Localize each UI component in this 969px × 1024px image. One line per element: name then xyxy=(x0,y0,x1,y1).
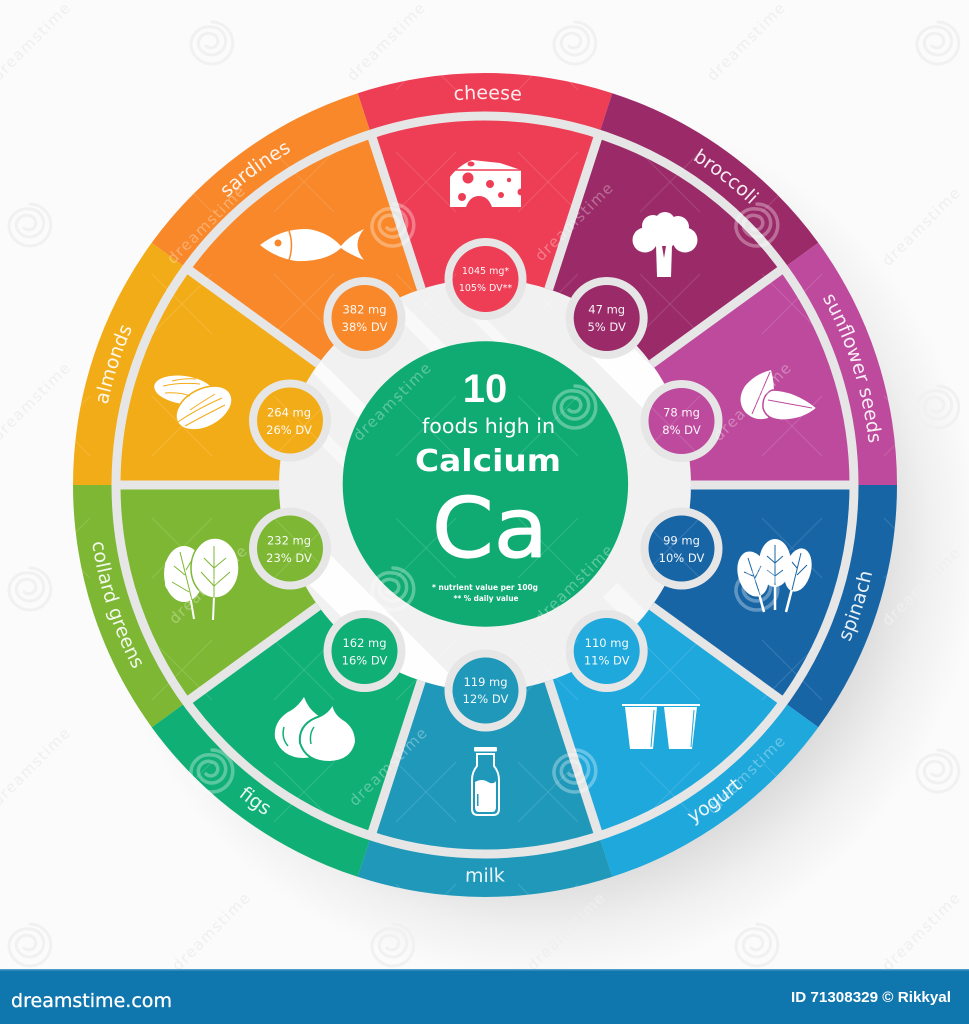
label: figs: figs xyxy=(240,786,270,814)
label: sunflower seeds: sunflower seeds xyxy=(823,294,882,442)
value bubble: collard greens: 23% DV xyxy=(266,551,312,565)
central hub background with streaks xyxy=(279,283,691,687)
icon: collard greens xyxy=(164,538,239,620)
label: broccoli: broccoli xyxy=(694,148,760,204)
value bubble: sunflower seeds xyxy=(640,380,722,462)
background watermark: dreamstime xyxy=(343,0,430,85)
value bubble: yogurt xyxy=(566,610,648,692)
icon: spinach xyxy=(733,539,816,612)
value bubble: milk: 12% DV xyxy=(463,692,508,706)
icon: figs xyxy=(275,697,356,762)
panel: sunflower seeds xyxy=(640,242,897,485)
value bubble: sardines: 38% DV xyxy=(342,320,387,334)
panel: figs xyxy=(152,606,422,877)
value bubble: collard greens: 232 mg xyxy=(267,534,311,548)
icon: fish xyxy=(260,229,364,261)
heading: foods high in: foods high in xyxy=(422,414,555,438)
ring and dividers xyxy=(116,116,854,854)
value bubble: almonds: 26% DV xyxy=(266,423,312,437)
value bubble: broccoli xyxy=(566,277,648,359)
label: sardines: sardines xyxy=(222,143,290,197)
panel: center circle xyxy=(343,341,628,627)
background watermark: dreamstime xyxy=(878,543,965,630)
value bubble: figs: 16% DV xyxy=(342,654,387,668)
overlay watermark: dreamstime xyxy=(531,540,618,627)
value bubble: spinach: 10% DV xyxy=(659,551,704,565)
icon: milk bottle xyxy=(472,747,499,815)
background watermark: dreamstime xyxy=(168,888,255,975)
footnotes xyxy=(432,583,538,603)
icon: yogurt cups xyxy=(622,704,700,749)
panel: almonds xyxy=(73,242,331,485)
value bubble: cheese xyxy=(444,238,526,320)
value bubble: yogurt: 110 mg xyxy=(585,636,629,650)
label: milk: milk xyxy=(466,867,505,882)
icon: sunflower seeds xyxy=(740,370,817,420)
footer brand: dreamstime.com xyxy=(11,990,172,1012)
panel: spinach xyxy=(640,485,897,728)
heading: Ca symbol: Ca xyxy=(432,480,548,577)
heading: 10: 10 xyxy=(463,367,507,411)
panel: collard greens xyxy=(73,485,331,728)
background watermark: dreamstime xyxy=(878,183,965,270)
footnotes: * nutrient value per 100g xyxy=(432,583,538,592)
value bubble: almonds xyxy=(249,380,331,462)
label: spinach: spinach xyxy=(841,572,872,641)
icon: almonds xyxy=(152,372,239,439)
overlay watermark: dreamstime xyxy=(349,358,436,445)
panel: milk xyxy=(358,650,612,897)
label: almonds: almonds xyxy=(96,325,132,404)
panel: broccoli xyxy=(548,93,818,364)
label: yogurt: yogurt xyxy=(688,779,742,826)
value bubble: yogurt: 11% DV xyxy=(584,654,630,668)
value bubble: figs xyxy=(324,610,406,692)
value bubble: sardines: 382 mg xyxy=(342,302,387,316)
footnotes: ** % daily value xyxy=(454,594,518,603)
value bubble: milk: 119 mg xyxy=(463,675,508,689)
overlay watermark: dreamstime xyxy=(709,358,796,445)
label: collard greens: collard greens xyxy=(92,542,142,668)
background watermark: dreamstime xyxy=(523,888,610,975)
value bubble: milk xyxy=(444,650,526,732)
value bubble: broccoli: 5% DV xyxy=(587,320,626,334)
value bubble: broccoli: 47 mg xyxy=(588,302,625,316)
footer bar xyxy=(0,969,969,1024)
value bubble: spinach: 99 mg xyxy=(663,534,700,548)
heading: Calcium: Calcium xyxy=(415,444,561,479)
overlay watermark: dreamstime xyxy=(345,723,432,810)
overlay watermark: dreamstime xyxy=(531,178,618,265)
panel: cheese xyxy=(358,73,612,320)
overlay watermark: dreamstime xyxy=(703,731,790,818)
subtle lattice watermark xyxy=(73,73,897,897)
label: cheese: cheese xyxy=(454,85,521,100)
icon: broccoli xyxy=(632,212,698,277)
value bubble: spinach xyxy=(640,508,722,590)
overlay watermark: dreamstime xyxy=(165,541,252,628)
footer image id: ID 71308329 © Rikkyal xyxy=(791,990,951,1006)
icon: cheese xyxy=(450,160,524,207)
value bubble: cheese: 1045 mg* xyxy=(462,266,509,277)
background watermark: dreamstime xyxy=(703,0,790,85)
overlay watermark xyxy=(163,178,796,818)
value bubble: cheese: 105% DV** xyxy=(459,283,512,294)
overlay watermark: dreamstime xyxy=(163,181,250,268)
value bubble: figs: 162 mg xyxy=(342,636,387,650)
value bubble: sardines xyxy=(324,277,406,359)
value bubble: almonds: 264 mg xyxy=(267,406,311,420)
panel: sardines xyxy=(152,93,422,364)
panel: yogurt xyxy=(548,606,818,877)
value bubble: sunflower seeds: 78 mg xyxy=(663,406,700,420)
background watermark: dreamstime xyxy=(878,888,965,975)
value bubble: sunflower seeds: 8% DV xyxy=(662,423,701,437)
value bubble: collard greens xyxy=(249,508,331,590)
